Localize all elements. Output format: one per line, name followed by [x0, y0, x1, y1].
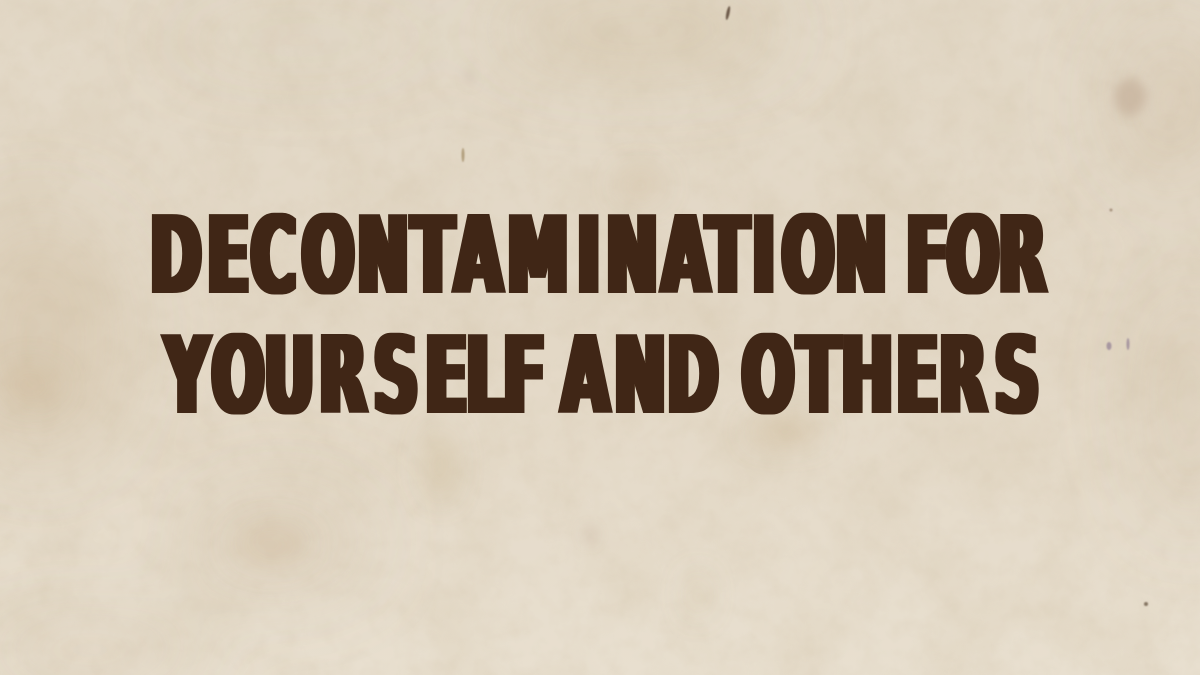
- title: [150, 192, 1046, 439]
- specks: [462, 6, 1148, 606]
- title line 1: DECONTAMINATION FOR: [150, 192, 1046, 319]
- title line 2: YOURSELF AND OTHERS: [164, 312, 1039, 439]
